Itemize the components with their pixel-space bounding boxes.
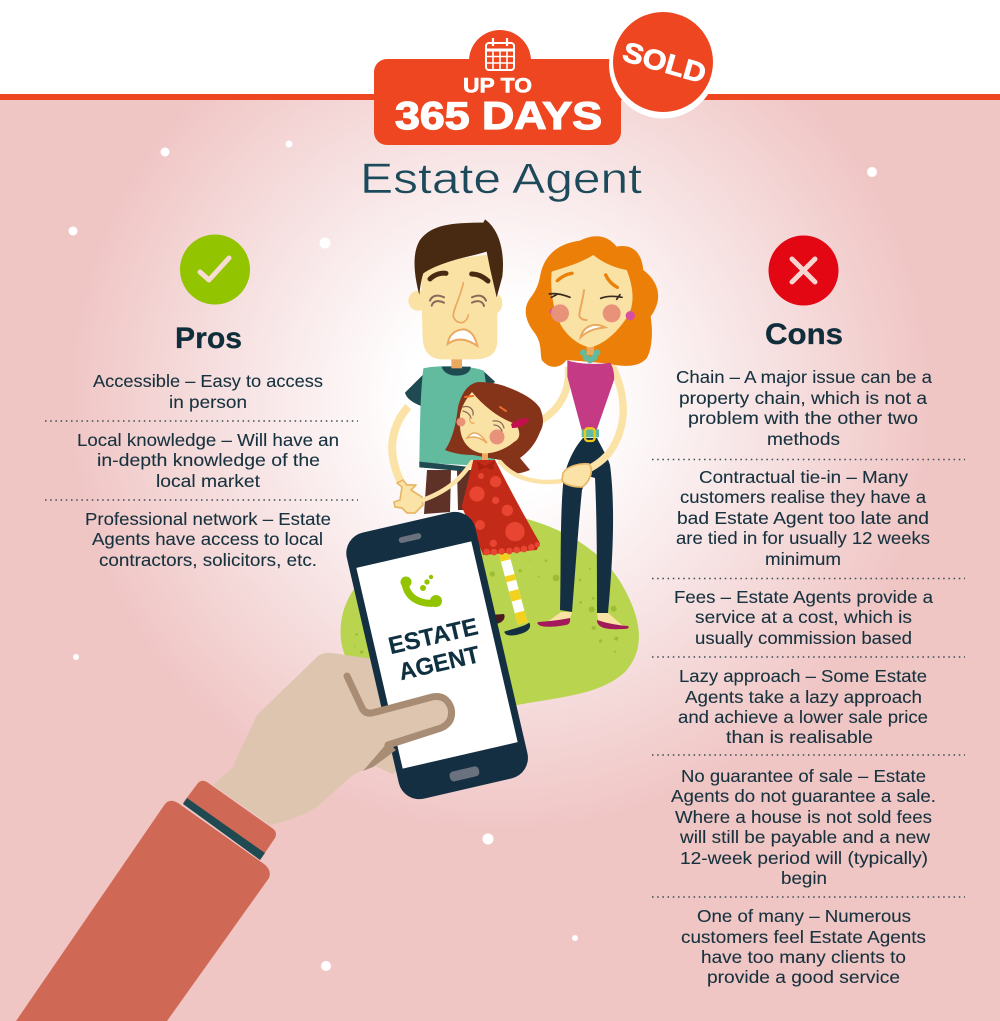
girl dress xyxy=(462,460,540,555)
text: local knowledge: in-depth knowledge of the xyxy=(97,450,320,470)
text: lazy approach: Lazy approach – Some Estate xyxy=(679,666,927,686)
man ears xyxy=(408,291,502,313)
text: one of many: provide a good service xyxy=(707,967,900,987)
text: professional network: Agents have access to local xyxy=(92,529,323,549)
icon: cross xyxy=(768,236,838,306)
illustration: smartphone xyxy=(342,508,532,803)
heading: cons: Cons xyxy=(765,318,843,351)
phone text xyxy=(386,613,483,686)
text: local knowledge: Local knowledge – Will have an xyxy=(77,430,339,450)
cuff xyxy=(183,781,276,860)
phone screen xyxy=(356,541,518,769)
girl hair xyxy=(445,382,543,473)
text: lazy approach xyxy=(678,666,928,747)
illustration: woman xyxy=(526,236,658,470)
text: no guarantee of sale: 12-week period will (typically) xyxy=(680,848,928,868)
text: lazy approach: and achieve a lower sale price xyxy=(678,707,928,727)
icon: check mark xyxy=(180,234,250,304)
man features xyxy=(430,273,488,346)
text: contractual tie-in: are tied in for usually 12 weeks xyxy=(676,528,930,548)
text: professional network: Professional network – Estate xyxy=(85,509,331,529)
text: no guarantee of sale: begin xyxy=(781,868,827,888)
phone text: ESTATE xyxy=(386,613,481,660)
text: accessible: Accessible – Easy to access xyxy=(93,371,323,391)
heading: pros: Pros xyxy=(175,322,242,355)
woman belt xyxy=(582,428,599,441)
illustration: man legs xyxy=(424,470,472,514)
man hand xyxy=(394,480,423,513)
text: fees xyxy=(674,587,933,648)
text: one of many: have too many clients to xyxy=(701,947,906,967)
text: no guarantee of sale: will still be payable and a new xyxy=(679,827,930,847)
man face xyxy=(421,253,497,359)
arm sleeve xyxy=(16,801,270,1021)
text: local knowledge xyxy=(77,430,339,491)
panel: cons xyxy=(652,236,965,987)
illustration: hand back xyxy=(213,653,410,825)
text: one of many xyxy=(681,906,926,987)
girl arms xyxy=(423,462,562,500)
text: lazy approach: Agents take a lazy approach xyxy=(685,687,922,707)
text: professional network: contractors, solicitors, etc. xyxy=(99,550,317,570)
woman neck xyxy=(587,345,594,355)
text: chain: problem with the other two xyxy=(688,408,918,428)
woman hair xyxy=(526,236,658,367)
text: lazy approach: than is realisable xyxy=(726,727,873,747)
text: contractual tie-in xyxy=(676,467,930,569)
text: chain: methods xyxy=(767,429,840,449)
woman features xyxy=(549,273,622,337)
icon: green handset xyxy=(400,575,442,607)
girl hair clip xyxy=(511,418,529,428)
man arm xyxy=(392,407,408,482)
woman jeans xyxy=(560,438,613,613)
text: no guarantee of sale: Where a house is not sold fees xyxy=(675,807,932,827)
girl shoe back xyxy=(490,614,505,624)
text: chain: Chain – A major issue can be a xyxy=(676,367,932,387)
man hair xyxy=(415,219,503,297)
illustration: man xyxy=(392,219,503,482)
woman top xyxy=(567,360,614,430)
text: chain xyxy=(676,367,932,449)
girl legs and dress xyxy=(462,460,540,635)
text: up to: UP TO xyxy=(463,74,532,98)
girl neck xyxy=(482,451,488,463)
text: accessible xyxy=(93,371,323,412)
woman shoes xyxy=(537,618,629,629)
cuff band xyxy=(183,798,265,860)
text: professional network xyxy=(85,509,331,570)
man shirt xyxy=(405,366,496,472)
illustration: girl xyxy=(423,382,591,500)
illustration: green ground xyxy=(341,518,639,705)
phone speaker xyxy=(398,533,422,544)
text: local knowledge: local market xyxy=(156,471,260,491)
phone home button xyxy=(449,766,480,782)
text: contractual tie-in: customers realise they have a xyxy=(680,487,926,507)
woman earrings and cheeks xyxy=(550,304,635,322)
illustration: thumb xyxy=(330,676,452,771)
text: sold: SOLD xyxy=(619,36,710,89)
text: no guarantee of sale: No guarantee of sale – Estate xyxy=(681,766,926,786)
illustration: sleeve xyxy=(16,781,276,1021)
girl face xyxy=(460,392,519,453)
title: Estate Agent xyxy=(360,155,642,203)
text: accessible: in person xyxy=(169,392,247,412)
man neck xyxy=(451,357,462,368)
text: fees: usually commission based xyxy=(695,628,912,648)
woman arms xyxy=(542,367,569,420)
illustration: woman lower body xyxy=(537,438,629,629)
text: one of many: customers feel Estate Agents xyxy=(681,927,926,947)
text: fees: Fees – Estate Agents provide a xyxy=(674,587,933,607)
girl striped leg xyxy=(504,554,523,623)
woman face xyxy=(551,255,633,347)
text: fees: service at a cost, which is xyxy=(695,607,912,627)
text: contractual tie-in: bad Estate Agent too late and xyxy=(677,508,929,528)
text: one of many: One of many – Numerous xyxy=(697,906,911,926)
text: no guarantee of sale: Agents do not guarantee a sale. xyxy=(671,786,936,806)
girl shoe xyxy=(504,623,530,635)
text: chain: property chain, which is not a xyxy=(679,388,927,408)
text: contractual tie-in: minimum xyxy=(765,549,841,569)
text: contractual tie-in: Contractual tie-in – Many xyxy=(699,467,908,487)
girl cheeks xyxy=(456,418,504,444)
girl features xyxy=(463,396,506,443)
phone text: AGENT xyxy=(396,641,483,686)
text: 365 days: 365 DAYS xyxy=(395,95,602,138)
badge: up to 365 days xyxy=(374,30,621,145)
text: no guarantee of sale xyxy=(671,766,936,888)
woman necklace xyxy=(580,349,600,363)
decorative white dots xyxy=(68,140,877,971)
badge: sold xyxy=(609,10,717,118)
icon: calendar xyxy=(486,38,514,70)
woman clasped hands xyxy=(562,464,591,487)
panel: pros xyxy=(45,234,358,570)
woman feet xyxy=(547,612,623,626)
